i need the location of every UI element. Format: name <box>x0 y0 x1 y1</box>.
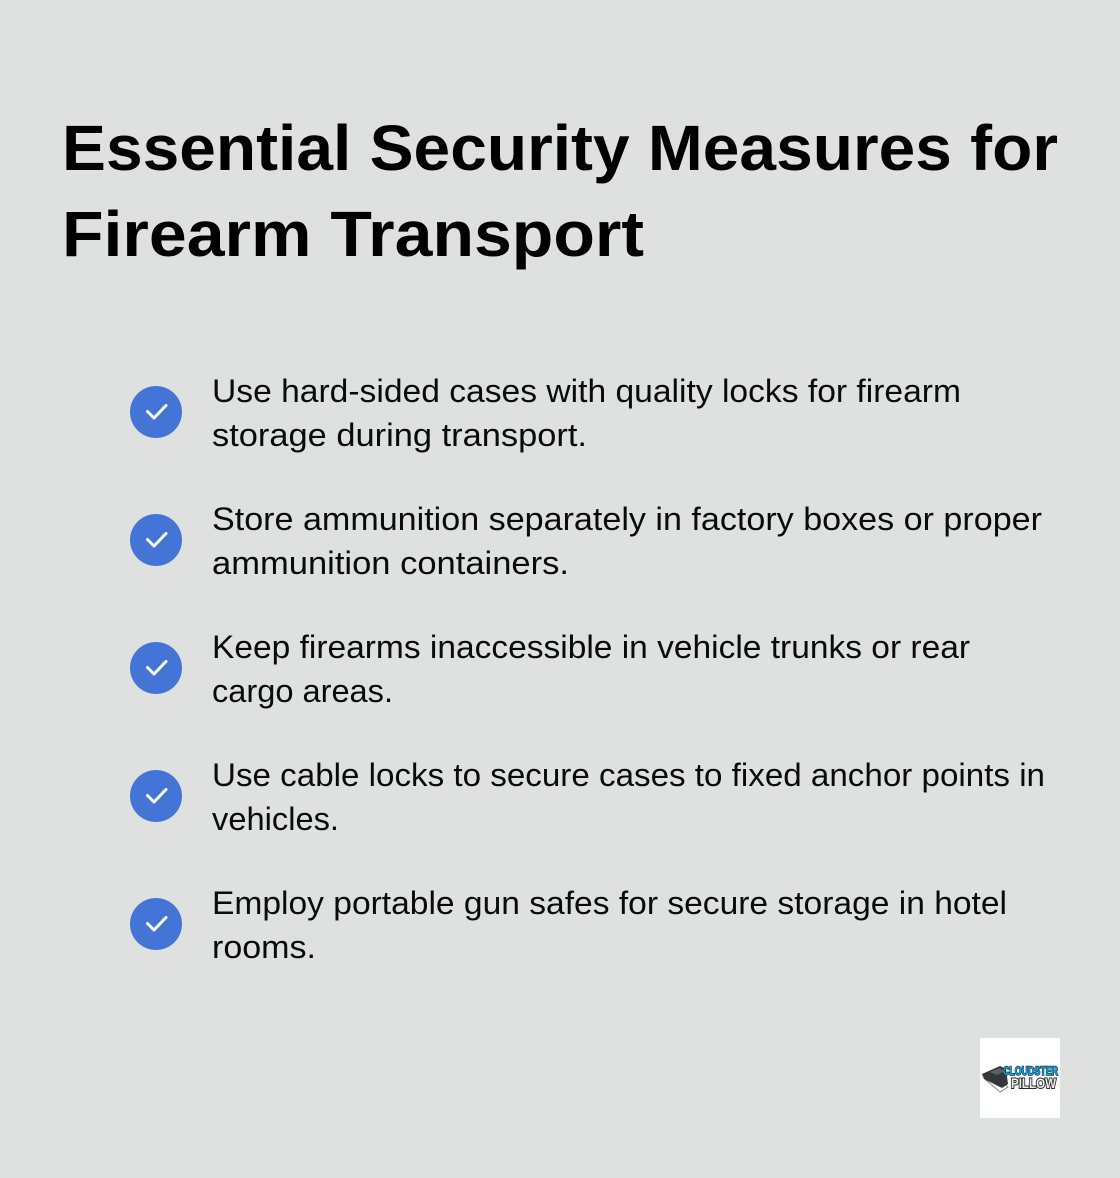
item 3: inaccessible firearms <box>130 629 970 709</box>
icon: check badge 4 <box>130 770 182 822</box>
text: item 2: ammunition containers. <box>212 545 569 581</box>
text: item 5 <box>212 885 1007 965</box>
checklist <box>130 373 1045 965</box>
logo wordmark <box>1003 1064 1058 1091</box>
text: item 4: Use cable locks to secure cases to fixed anchor points in <box>212 757 1045 793</box>
text: item 3: cargo areas. <box>212 673 393 709</box>
text: item 2 <box>212 501 1042 581</box>
text: item 3: Keep firearms inaccessible in vehicle trunks or rear <box>212 629 970 665</box>
logo wordmark: PILLOW <box>1011 1076 1056 1091</box>
text: item 1: storage during transport. <box>212 417 587 453</box>
icon: pillow <box>982 1066 1008 1092</box>
text: item 5: rooms. <box>212 929 316 965</box>
item 2: ammunition storage <box>130 501 1042 581</box>
logo wordmark: CLOUDSTER <box>1003 1064 1058 1078</box>
title: Firearm Transport <box>62 198 644 270</box>
icon: check badge 5 <box>130 898 182 950</box>
text: item 4: vehicles. <box>212 801 339 837</box>
item 4: cable locks <box>130 757 1045 837</box>
text: item 1 <box>212 373 961 453</box>
logo: Cloudster Pillow <box>980 1038 1060 1118</box>
text: item 1: Use hard-sided cases with quality locks for firearm <box>212 373 961 409</box>
text: item 5: Employ portable gun safes for secure storage in hotel <box>212 885 1007 921</box>
text: item 3 <box>212 629 970 709</box>
item 1: hard-sided cases <box>130 373 961 453</box>
item 5: portable gun safes <box>130 885 1007 965</box>
title: Essential Security Measures for <box>62 112 1058 184</box>
icon: check badge 2 <box>130 514 182 566</box>
title <box>62 112 1058 270</box>
text: item 2: Store ammunition separately in factory boxes or proper <box>212 501 1042 537</box>
icon: check badge 1 <box>130 386 182 438</box>
text: item 4 <box>212 757 1045 837</box>
icon: check badge 3 <box>130 642 182 694</box>
